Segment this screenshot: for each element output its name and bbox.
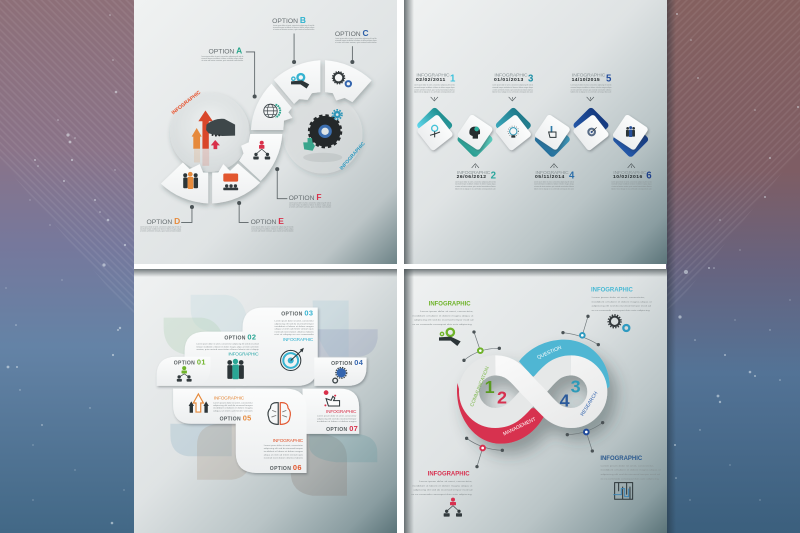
block: red infographic text: ex ea commodo consequat duis aute adipiscing.: [411, 493, 473, 496]
label: option 02: Lorem ipsum dolor sit amet, consectetur adipiscing elit sed do eiusmod: [196, 343, 259, 346]
option F: Lorem ipsum dolor sit amet, consectetur adipiscing elit sed do: [289, 201, 332, 204]
infinity ribbon: [457, 340, 610, 444]
item 2: INFOGRAPHIC: [457, 170, 491, 176]
label: option 03: incididunt ut labore et dolore magna: [275, 325, 315, 328]
item 4: INFOGRAPHIC: [535, 170, 569, 176]
label: option 05: Lorem ipsum dolor sit amet, consectetur: [213, 401, 253, 404]
item 5: 14/10/2015: [572, 77, 600, 83]
panel 2: diamond timeline infographic: [404, 0, 667, 264]
item 6: eiusmod tempor incididunt ut labore et dolore magna aliqua: [611, 183, 652, 186]
connector: blue node: [561, 315, 600, 346]
block: blue infographic text: INFOGRAPHIC: [591, 288, 634, 294]
right glass circle: [283, 94, 362, 174]
label: option 01: OPTION 01: [174, 358, 206, 366]
label: option 06: [264, 438, 304, 472]
cards: [157, 308, 367, 473]
icon: org chart: [177, 366, 192, 382]
coloured diamonds behind: [416, 106, 649, 158]
label: option 03: INFOGRAPHIC: [283, 337, 314, 342]
icon: team: [227, 359, 244, 379]
ribbon labels: QUESTION: [536, 345, 563, 361]
icon: globe gear: [264, 104, 280, 118]
option E: Lorem ipsum dolor sit amet, consectetur adipiscing elit sed do: [251, 225, 294, 228]
label: option 02: OPTION 02: [224, 332, 256, 341]
icon: large gear cluster: [303, 110, 342, 162]
option F: ut enim ad minim veniam, quis nostrud exercitation: [289, 205, 332, 208]
label: option 06: incididunt ut labore et dolore magna: [264, 450, 304, 453]
icon: head with speech: [469, 127, 480, 139]
item 5: eiusmod tempor incididunt ut labore et dolore magna aliqua: [571, 86, 612, 89]
option B: eiusmod tempor incididunt ut labore et dolore magna aliqua: [273, 26, 315, 29]
option D: OPTION D: [146, 216, 180, 226]
icon: people: [626, 126, 635, 137]
item 2: 2: [491, 170, 496, 181]
label: option 04: OPTION 04: [331, 358, 364, 367]
option C: OPTION C: [335, 28, 369, 38]
block: blue infographic text: incididunt ut labore et dolore magna aliqua ut: [592, 300, 652, 303]
block: blue infographic text: [591, 288, 652, 312]
block: blue infographic text: ex ea commodo consequat duis aute adipiscing.: [592, 309, 651, 312]
label: option 03: [275, 309, 315, 342]
label: option 03: OPTION 03: [281, 309, 313, 318]
item 1: laboris nisi ut aliquip ex ea commodo consequat duis aute: [414, 91, 455, 94]
label: option 05: adipiscing elit sed do eiusmod tempor: [213, 404, 253, 407]
left glass circle: [170, 93, 250, 172]
item 2: Lorem ipsum dolor sit amet, consectetur adipiscing elit sed do: [455, 180, 496, 183]
block: red infographic text: adipiscing elit sed do eiusmod tempor incid ad: [413, 489, 473, 492]
option E: OPTION E: [251, 216, 284, 226]
numerals: [485, 377, 581, 411]
item 6: [611, 170, 652, 190]
segments: six ring wedges: [161, 60, 372, 203]
curved label left: INFOGRAPHIC: [171, 90, 202, 116]
icon: gears: [608, 315, 629, 331]
label: option 06: Lorem ipsum dolor sit amet, consectetur: [264, 444, 303, 447]
option E: ut enim ad minim veniam, quis nostrud exercitation: [251, 229, 294, 232]
icon: people team: [183, 172, 198, 189]
item 4: 4: [569, 170, 575, 181]
option A: Lorem ipsum dolor sit amet, consectetur adipiscing elit sed do: [201, 55, 244, 58]
block: red infographic text: [411, 472, 473, 496]
option D: eiusmod tempor incididunt ut labore et dolore magna aliqua: [140, 227, 182, 230]
label: option 05: [213, 396, 254, 422]
item 1: [414, 73, 456, 94]
block: green infographic text: incididunt ut labore et dolore magna aliqua ut: [412, 314, 474, 317]
icon: target: [587, 127, 597, 136]
item 2: 26/06/2012: [457, 174, 486, 180]
block: navy infographic text: Lorem ipsum dolor sit amet, consectetur,: [601, 464, 655, 467]
block: navy infographic text: ex ea commodo consequat duis aute adipiscing.: [601, 477, 660, 480]
item 4: [534, 170, 575, 190]
item 3: [492, 73, 534, 94]
option A: [201, 45, 244, 62]
item 6: 10/02/2016: [613, 174, 643, 180]
option F: [289, 192, 332, 208]
item 5: Lorem ipsum dolor sit amet, consectetur adipiscing elit sed do: [571, 84, 612, 87]
label: option 03: Lorem ipsum dolor sit amet, consectetur: [275, 320, 314, 323]
option B: ut enim ad minim veniam, quis nostrud exercitation: [273, 28, 315, 31]
label: option 07: adipiscing elit sed do eiusmod tempor: [317, 417, 357, 420]
item 3: laboris nisi ut aliquip ex ea commodo consequat duis aute: [492, 91, 534, 94]
item 2: ut enim ad minim veniam, quis nostrud exercitation ullamco: [455, 185, 496, 188]
panel 1: circular options infographic: [134, 0, 397, 264]
translucent background leaves: [164, 295, 378, 496]
block: green infographic text: [412, 302, 474, 326]
option D: [140, 216, 182, 232]
icon: brain: [268, 403, 290, 424]
icon: red org chart: [444, 498, 462, 517]
label: option 06: OPTION 06: [270, 463, 302, 472]
label: option 07: [317, 409, 358, 433]
item 5: 5: [606, 73, 612, 84]
option F: OPTION F: [289, 192, 322, 202]
block: blue infographic text: Lorem ipsum dolor sit amet, consectetur,: [592, 296, 646, 299]
icon: two gears: [332, 72, 351, 86]
item 1: 02/02/2011: [416, 77, 446, 83]
label: option 05: INFOGRAPHIC: [214, 396, 245, 401]
ribbon labels: MANAGEMENT: [502, 416, 537, 437]
label: option 03: adipiscing elit sed do eiusmod tempor: [275, 322, 314, 325]
item 4: laboris nisi ut aliquip ex ea commodo consequat duis aute: [534, 187, 575, 190]
icon: org chart: [253, 141, 270, 159]
item 4: 05/11/2014: [535, 174, 565, 180]
block: green infographic text: INFOGRAPHIC: [429, 302, 471, 308]
label: option 03: nostrud exercitation ullamco laboris: [275, 330, 314, 333]
option A: OPTION A: [208, 45, 242, 55]
block: navy infographic text: [600, 456, 661, 480]
block: red infographic text: incididunt ut labore et dolore magna aliqua ut: [412, 484, 473, 487]
panel 3: rounded option cards infographic: [134, 269, 397, 533]
item 5: laboris nisi ut aliquip ex ea commodo consequat duis aute: [571, 91, 612, 94]
item 3: 01/01/2013: [494, 77, 524, 83]
white diamond cards: [416, 114, 649, 151]
item 5: INFOGRAPHIC: [572, 73, 606, 79]
icon: dollar gears: [333, 367, 347, 383]
label: option 06: adipiscing elit sed do eiusmod tempor: [264, 447, 303, 450]
numerals: 2: [497, 388, 507, 408]
label: option 07: INFOGRAPHIC: [326, 409, 357, 414]
option A: ut enim ad minim veniam, quis nostrud exercitation: [201, 59, 244, 62]
item 1: ut enim ad minim veniam, quis nostrud exercitation ullamco: [414, 88, 455, 91]
icon: presentation audience: [223, 174, 238, 190]
background: right starry strip: [666, 0, 800, 533]
item 5: ut enim ad minim veniam, quis nostrud exercitation ullamco: [571, 88, 612, 91]
item 4: eiusmod tempor incididunt ut labore et dolore magna aliqua: [534, 183, 575, 186]
item 3: Lorem ipsum dolor sit amet, consectetur adipiscing elit sed do: [492, 84, 534, 87]
item 3: eiusmod tempor incididunt ut labore et dolore magna aliqua: [492, 86, 534, 89]
icon: growth arrows and hand: [192, 111, 235, 166]
block: navy infographic text: incididunt ut labore et dolore magna aliqua ut: [601, 469, 661, 472]
icon: hand with gears: [291, 74, 309, 88]
item 3: 3: [528, 73, 534, 84]
option F: eiusmod tempor incididunt ut labore et dolore magna aliqua: [289, 203, 332, 206]
item 3: INFOGRAPHIC: [494, 73, 528, 79]
connector: green node: [462, 330, 501, 362]
item 6: INFOGRAPHIC: [613, 170, 647, 176]
option C: Lorem ipsum dolor sit amet, consectetur adipiscing elit sed do: [335, 37, 377, 40]
leader lines: [181, 34, 354, 222]
connector: navy node: [566, 421, 604, 453]
icon: plant: [430, 125, 440, 137]
label: option 07: incididunt ut labore et dolore magna: [317, 420, 357, 423]
icon: light bulb: [508, 126, 519, 138]
numerals: 4: [560, 391, 570, 411]
ribbon labels: COMMUNICATION: [469, 365, 491, 408]
label: option 05: aliqua ut enim ad minim veniam: [213, 409, 253, 412]
label: option 05: incididunt ut labore et dolore magna: [213, 407, 254, 410]
panel 4: infinity loop infographic: [404, 269, 667, 533]
pointer marks: [431, 97, 635, 168]
label: option 02: INFOGRAPHIC: [228, 351, 259, 356]
option C: ut enim ad minim veniam, quis nostrud exercitation: [335, 41, 377, 44]
label: option 06: aliqua ut enim ad minim veniam quis: [264, 453, 303, 456]
block: red infographic text: INFOGRAPHIC: [428, 472, 470, 478]
ribbon labels: RESEARCH: [580, 390, 600, 417]
ribbon labels: [469, 345, 600, 437]
connector: red node: [465, 437, 504, 468]
label: option 03: aliqua ut enim ad minim veniam quis: [275, 328, 314, 331]
block: blue infographic text: adipiscing elit sed do eiusmod tempor incid ad: [592, 305, 652, 308]
option C: eiusmod tempor incididunt ut labore et dolore magna aliqua: [335, 39, 377, 42]
label: option 02: [196, 332, 260, 356]
block: green infographic text: adipiscing elit sed do eiusmod tempor incid ad: [414, 319, 474, 322]
curved label right: INFOGRAPHIC: [339, 141, 367, 171]
option B: OPTION B: [272, 15, 306, 25]
item 6: Lorem ipsum dolor sit amet, consectetur adipiscing elit sed do: [611, 180, 652, 183]
item 1: Lorem ipsum dolor sit amet, consectetur adipiscing elit sed do: [414, 84, 455, 87]
icon: target with arrow: [281, 348, 304, 371]
icon: hand with green gears: [439, 329, 461, 346]
item 1: 1: [450, 73, 456, 84]
block: navy infographic text: INFOGRAPHIC: [600, 456, 643, 462]
icon: touch hand: [549, 126, 556, 137]
item 2: [455, 170, 496, 190]
numerals: 3: [571, 377, 581, 397]
block: green infographic text: ex ea commodo consequat duis aute adipiscing.: [412, 323, 473, 326]
icon: thumbs up with hearts: [324, 390, 340, 406]
item 6: 6: [646, 170, 652, 181]
item 1: eiusmod tempor incididunt ut labore et dolore magna aliqua: [414, 86, 455, 89]
icon: rising arrows: [189, 394, 209, 413]
option E: [251, 216, 294, 232]
item 1: INFOGRAPHIC: [416, 73, 450, 79]
option E: eiusmod tempor incididunt ut labore et dolore magna aliqua: [251, 227, 294, 230]
label: option 07: Lorem ipsum dolor sit amet, consectetur: [317, 415, 357, 418]
item 2: laboris nisi ut aliquip ex ea commodo consequat duis aute: [455, 187, 496, 190]
label: option 07: OPTION 07: [326, 424, 358, 433]
label: option 05: OPTION 05: [220, 413, 252, 422]
block: red infographic text: Lorem ipsum dolor sit amet, consectetur,: [419, 480, 473, 483]
numerals: 1: [485, 377, 495, 397]
item 4: ut enim ad minim veniam, quis nostrud exercitation ullamco: [534, 185, 575, 188]
background: left starry strip: [0, 0, 134, 533]
label: option 02: veniam, quis nostrud exercitation ullamco laboris nisi ut aliquip: [196, 348, 260, 351]
block: green infographic text: Lorem ipsum dolor sit amet, consectetur,: [420, 310, 474, 313]
label: option 02: tempor incididunt ut labore et dolore magna aliqua ut enim ad minim: [196, 345, 259, 348]
label: option 06: INFOGRAPHIC: [273, 438, 304, 443]
label: option 03: nisi ut aliquip ex ea commodo: [275, 333, 315, 336]
option D: Lorem ipsum dolor sit amet, consectetur adipiscing elit sed do: [140, 225, 182, 228]
option B: Lorem ipsum dolor sit amet, consectetur adipiscing elit sed do: [273, 24, 315, 27]
item 6: laboris nisi ut aliquip ex ea commodo consequat duis aute: [611, 187, 652, 190]
item 3: ut enim ad minim veniam, quis nostrud exercitation ullamco: [492, 88, 534, 91]
item 4: Lorem ipsum dolor sit amet, consectetur adipiscing elit sed do: [534, 180, 575, 183]
item 5: [571, 73, 612, 94]
item 2: eiusmod tempor incididunt ut labore et dolore magna aliqua: [455, 183, 496, 186]
icon: maze: [613, 483, 633, 499]
label: option 06: nostrud exercitation ullamco laboris: [264, 456, 303, 459]
item 6: ut enim ad minim veniam, quis nostrud exercitation ullamco: [611, 185, 652, 188]
block: navy infographic text: adipiscing elit sed do eiusmod tempor incid ad: [601, 473, 661, 476]
option A: eiusmod tempor incididunt ut labore et dolore magna aliqua: [201, 57, 244, 60]
option B: [272, 15, 315, 31]
option C: [335, 28, 377, 44]
option D: ut enim ad minim veniam, quis nostrud exercitation: [140, 229, 182, 232]
